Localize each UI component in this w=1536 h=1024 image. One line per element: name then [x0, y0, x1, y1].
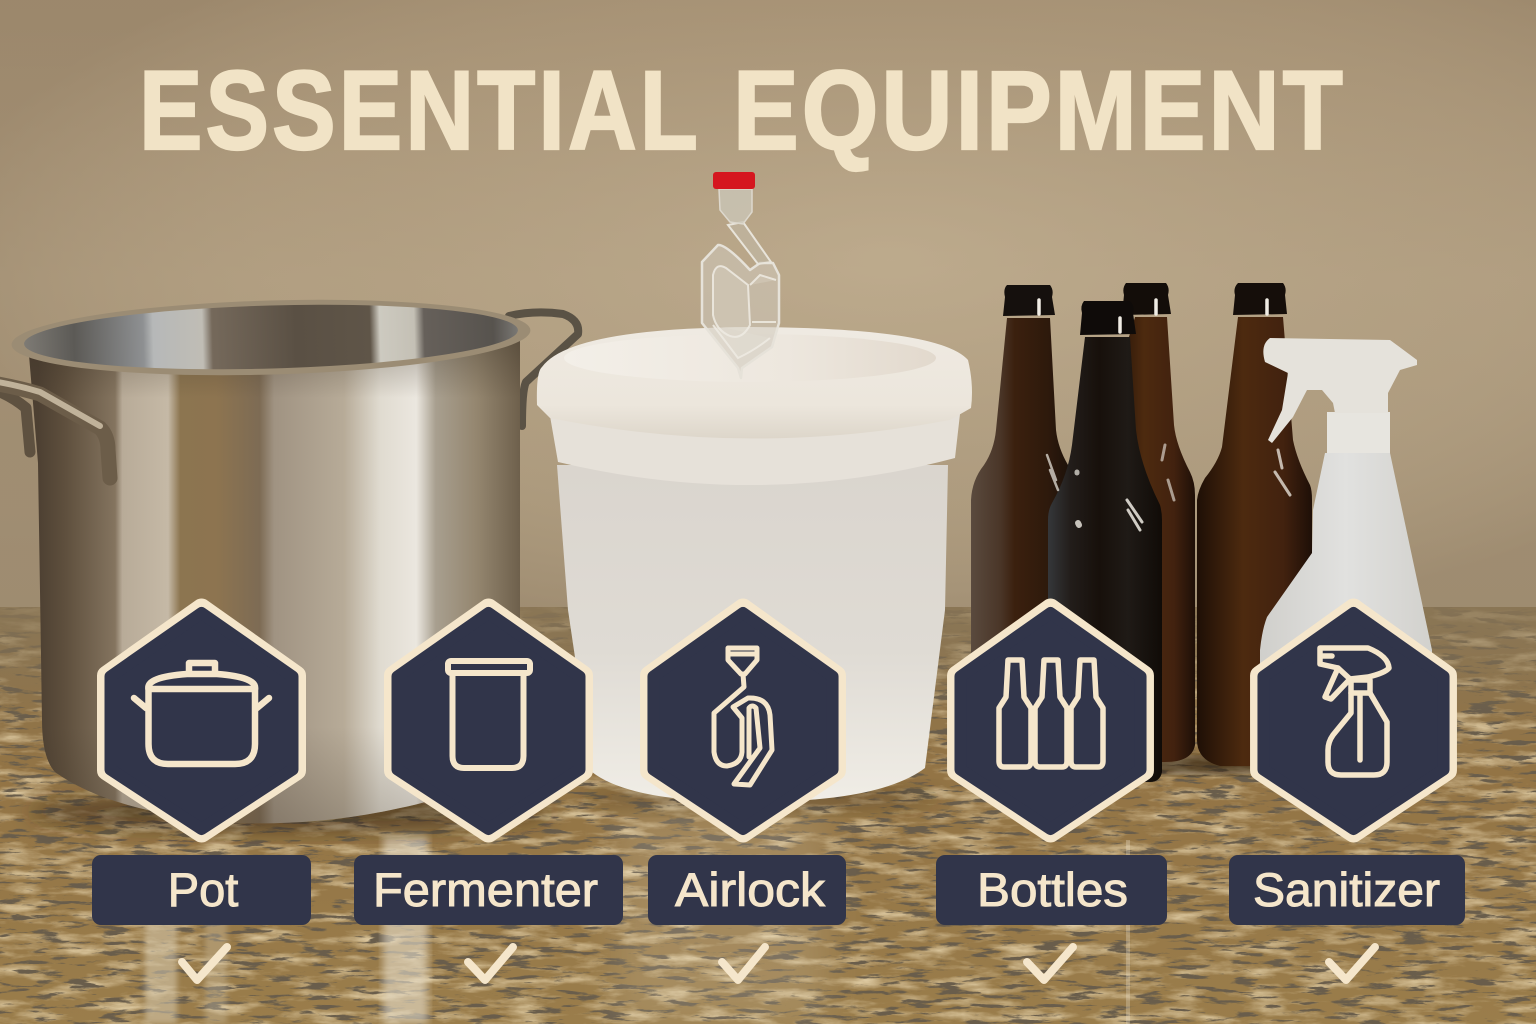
icon: spray bottle	[1320, 648, 1389, 775]
bottle 4	[1197, 317, 1312, 766]
item: pot	[92, 608, 311, 980]
check mark: bottles	[1027, 947, 1073, 980]
pot left handle	[0, 382, 110, 478]
label: pot: Pot	[168, 863, 238, 916]
bottle highlights	[1039, 300, 1290, 530]
pot body shading	[29, 340, 520, 823]
sprayer body	[1260, 453, 1432, 700]
item: sanitizer	[1229, 608, 1465, 980]
bucket lid recess	[564, 334, 936, 382]
bottle 3 lip	[1122, 283, 1171, 315]
item: fermenter	[354, 608, 623, 980]
bottle 2 front	[1048, 337, 1162, 782]
bottle 2 lip	[1080, 301, 1136, 335]
hexagon badge: bottles	[957, 608, 1144, 832]
item: airlock	[648, 608, 846, 980]
icon: airlock	[714, 648, 772, 785]
bucket body	[557, 465, 948, 802]
label: bottles	[936, 855, 1167, 925]
photo: brown bottles	[971, 283, 1312, 782]
icon: fermenter bucket	[448, 661, 530, 768]
title: EQUIPMENT	[733, 49, 1343, 173]
airlock upper bulb	[719, 189, 752, 224]
airlock chambers	[702, 245, 779, 378]
airlock inner loops	[713, 266, 776, 358]
bottle 4 lip	[1233, 283, 1287, 315]
hexagon badge: airlock	[650, 608, 836, 832]
pot rim	[11, 293, 531, 382]
pot right handle	[509, 312, 578, 426]
icon: three bottles	[999, 660, 1103, 767]
label: airlock	[648, 855, 846, 925]
airlock red cap	[713, 172, 755, 189]
pot interior	[23, 299, 519, 375]
label: airlock: Airlock	[675, 863, 826, 916]
bucket lid band	[550, 414, 960, 485]
label: sanitizer	[1229, 855, 1465, 925]
check mark: pot	[182, 947, 227, 980]
label: fermenter: Fermenter	[373, 863, 598, 916]
hexagon badge: pot	[107, 608, 296, 832]
sprayer head	[1263, 338, 1417, 443]
shadows under objects	[28, 755, 1320, 832]
title	[139, 49, 1343, 174]
bottle 1	[971, 318, 1068, 670]
sprayer collar	[1327, 412, 1390, 453]
hexagon badge: sanitizer	[1260, 608, 1447, 832]
hexagon badge: fermenter	[394, 608, 583, 832]
background: wall	[0, 0, 1536, 620]
label: fermenter	[354, 855, 623, 925]
check mark: sanitizer	[1329, 947, 1375, 980]
photo: clear airlock	[702, 172, 779, 378]
photo: white fermenter bucket	[537, 327, 972, 802]
bottle 1 lip	[1003, 285, 1055, 316]
photo: stainless steel pot	[0, 293, 578, 823]
bucket lid rim	[537, 327, 972, 439]
bottle 3	[1110, 317, 1195, 762]
item: bottles	[936, 608, 1167, 980]
photo: spray bottle	[1260, 338, 1432, 700]
title: ESSENTIAL	[139, 49, 698, 174]
check mark: fermenter	[468, 947, 513, 980]
label: sanitizer: Sanitizer	[1253, 863, 1440, 916]
background: granite countertop	[0, 607, 1536, 1024]
pot body	[29, 340, 520, 823]
check mark: airlock	[722, 947, 765, 980]
airlock twisted tube	[728, 222, 771, 264]
icon: cooking pot	[134, 663, 269, 764]
label: pot	[92, 855, 311, 925]
label: bottles: Bottles	[977, 863, 1128, 916]
